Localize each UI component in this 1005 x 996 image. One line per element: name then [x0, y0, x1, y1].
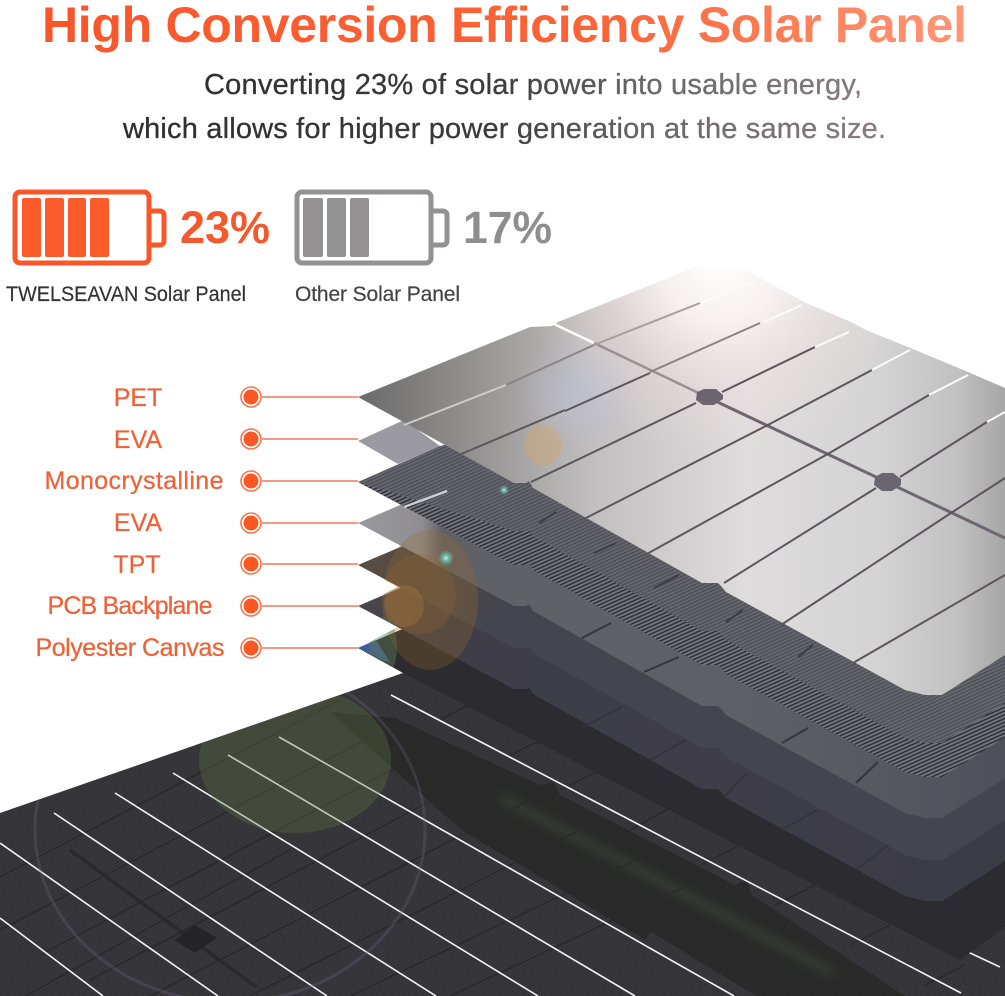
marker: EVA: [241, 429, 358, 449]
label: Polyester Canvas: Polyester Canvas: [36, 634, 224, 662]
flare: large brown: [382, 530, 478, 670]
subtitle: which allows for higher power generation at the same size.: [122, 113, 886, 145]
marker: PET: [241, 387, 358, 407]
lens flares: [35, 485, 509, 996]
layer: PCB backplane: [358, 583, 1005, 901]
canvas surface: [0, 640, 1005, 996]
top light flare: [358, 268, 1005, 470]
mono gaps: [539, 512, 813, 657]
blue corner reflection: [358, 640, 390, 662]
fold band: [330, 712, 905, 996]
flare: small peach spot: [524, 425, 562, 465]
marker: PCB Backplane: [241, 596, 358, 616]
marker: EVA: [241, 513, 358, 533]
layer: EVA upper: [358, 420, 440, 464]
comparison: other battery: [295, 192, 552, 306]
blue glow: [519, 335, 635, 451]
marker: TPT: [241, 554, 358, 574]
cross gap: [594, 343, 1005, 538]
flare: teal dots: [438, 485, 509, 566]
mono white line: [404, 491, 447, 507]
white slit: [554, 324, 594, 343]
marker: Polyester Canvas: [241, 638, 358, 658]
flare: green ellipse: [199, 687, 391, 833]
value 23%: 23%: [180, 202, 270, 253]
high contrast band: [358, 482, 1005, 777]
icon: orange battery 23%: [15, 192, 164, 263]
PET sheet: [358, 268, 1005, 695]
fold highlight: [500, 797, 833, 973]
spine and junction: [70, 850, 256, 987]
junction diamonds: [696, 389, 901, 491]
cell gaps: [459, 303, 1005, 663]
flare: green corner: [369, 617, 397, 668]
cell gaps on lower layers: [582, 623, 888, 870]
icon: grey battery 17%: [297, 192, 447, 263]
label TWELSEAVAN: TWELSEAVAN Solar Panel: [6, 283, 246, 306]
label: PET: PET: [114, 384, 162, 412]
layer labels: [36, 384, 224, 662]
layer: PET: [358, 268, 1005, 695]
layer: TPT: [358, 542, 1005, 860]
layer: monocrystalline: [358, 438, 1005, 777]
flare: rainbow ring: [35, 658, 425, 996]
label: EVA: EVA: [114, 509, 162, 537]
label other: Other Solar Panel: [295, 283, 460, 306]
value 17%: 17%: [463, 202, 552, 253]
white gap ends: [404, 282, 1005, 425]
label: TPT: TPT: [113, 551, 161, 579]
polyester sheet: [358, 625, 1005, 960]
subtitle: [122, 69, 886, 145]
label: PCB Backplane: PCB Backplane: [48, 592, 212, 620]
layer: EVA lower: [358, 500, 1005, 870]
layer: polyester canvas: [358, 625, 1005, 960]
label: EVA: EVA: [114, 426, 162, 454]
flare: brown middle: [384, 554, 456, 634]
callout markers: [241, 387, 358, 658]
subtitle: Converting 23% of solar power into usable energy,: [204, 69, 862, 101]
comparison: TWELSEAVAN battery: [6, 192, 270, 306]
marker: Monocrystalline: [241, 471, 358, 491]
mono cells: [358, 438, 1005, 777]
cell gaps: [0, 700, 965, 996]
white bus lines: [0, 695, 1005, 996]
panel: fabric canvas base: [0, 640, 1005, 996]
label: Monocrystalline: Monocrystalline: [44, 467, 224, 495]
flare: brown inner: [384, 585, 424, 627]
EVA lower sheet: [358, 500, 1005, 818]
